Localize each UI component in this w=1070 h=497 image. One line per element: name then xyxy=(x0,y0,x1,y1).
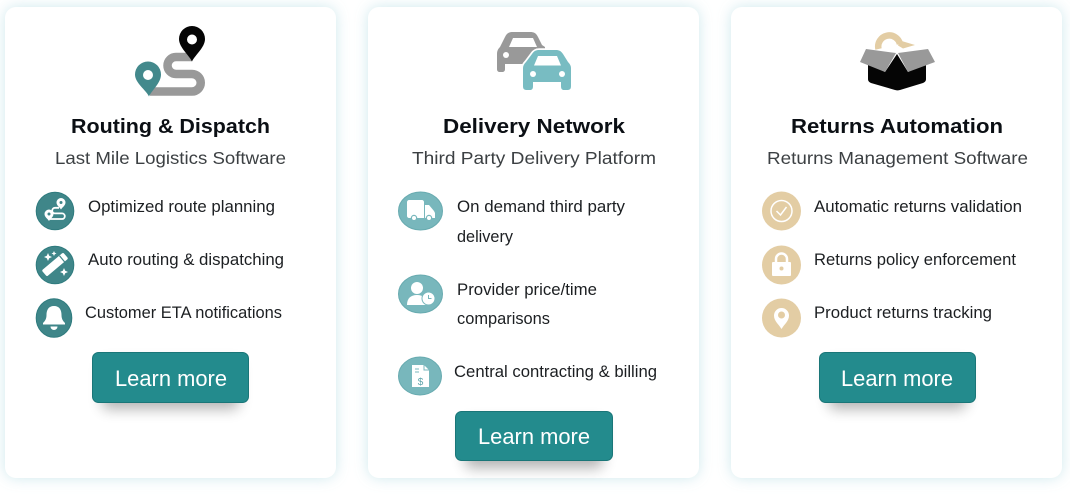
icon: bell xyxy=(36,299,72,337)
heading: returns automation: Returns Automation xyxy=(791,115,1003,138)
icon: mini route xyxy=(36,192,74,230)
icon: invoice document xyxy=(398,357,442,395)
icon: invoice document: $ xyxy=(418,377,424,388)
icon: two cars xyxy=(497,32,571,90)
text: on demand: On demand third party xyxy=(457,197,625,216)
text: comparisons: comparisons xyxy=(457,309,550,328)
text: returns policy: Returns policy enforcement xyxy=(814,250,1016,269)
button: learn more xyxy=(820,352,976,409)
heading: routing and dispatch: Routing & Dispatch xyxy=(71,115,270,138)
text: optimized route planning: Optimized route planning xyxy=(88,197,275,216)
icon: check circle xyxy=(762,192,801,230)
subheading: returns management: Returns Management Software xyxy=(767,148,1028,168)
icon: route with two pins xyxy=(135,26,205,96)
panel: returns automation xyxy=(731,7,1062,478)
icon: person with clock xyxy=(398,275,442,313)
text: customer eta: Customer ETA notifications xyxy=(85,303,282,322)
icon: padlock xyxy=(762,246,801,284)
text: delivery: delivery xyxy=(457,227,513,246)
heading: delivery network: Delivery Network xyxy=(443,115,626,138)
button: learn more: Learn more xyxy=(115,366,227,391)
text: automatic returns: Automatic returns validation xyxy=(814,197,1022,216)
panel: routing and dispatch xyxy=(5,7,336,478)
icon: magic wand xyxy=(36,246,74,284)
text: provider price: Provider price/time xyxy=(457,280,597,299)
icon: truck xyxy=(398,192,442,230)
button: learn more xyxy=(92,352,248,409)
panel: delivery network xyxy=(368,7,699,478)
text: auto routing: Auto routing & dispatching xyxy=(88,250,284,269)
subheading: third party: Third Party Delivery Platform xyxy=(412,148,656,168)
text: product returns: Product returns tracking xyxy=(814,303,992,322)
button: learn more: Learn more xyxy=(478,424,590,449)
button: learn more: Learn more xyxy=(841,366,953,391)
icon: location pin xyxy=(762,298,801,338)
button: learn more xyxy=(456,412,612,468)
subheading: last mile: Last Mile Logistics Software xyxy=(55,148,286,168)
text: central contracting: Central contracting & billing xyxy=(454,362,657,381)
icon: open box with return arrow xyxy=(860,35,935,90)
